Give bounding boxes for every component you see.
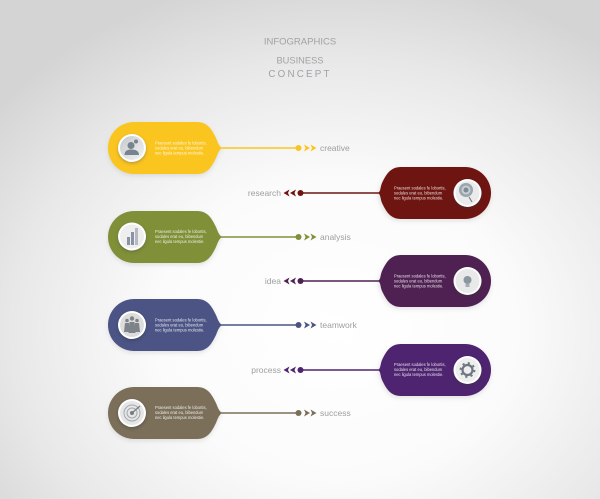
text block: Praesent sodales fe lobortis, [394,274,446,278]
icon: light bulb [454,267,482,296]
text block: Praesent sodales fe lobortis, [155,229,207,234]
panel: creative [108,122,350,176]
connector: success [220,412,298,414]
label: teamwork: teamwork [320,320,358,330]
text block: sodales erat eu, bibendum [155,410,204,415]
title: CONCEPT [268,69,332,80]
text block: sodales erat eu, bibendum [394,278,443,284]
marker: teamwork [296,322,316,328]
text block: nec ligula tempus molestie. [155,328,204,332]
text block: Praesent sodales fe lobortis, [155,405,207,410]
text block: nec ligula tempus molestie. [155,415,204,420]
text block: Praesent sodales fe lobortis, [394,362,446,367]
marker: success [296,410,316,416]
connector: analysis [220,236,298,238]
panel: idea [265,255,491,309]
text block: Praesent sodales fe lobortis, [155,318,207,322]
text block: Praesent sodales fe lobortis, [155,140,207,146]
connector: idea [301,280,380,282]
marker: analysis [296,234,316,240]
text block: sodales erat eu, bibendum [155,322,204,328]
icon: magnifier [454,179,482,208]
text block: sodales erat eu, bibendum [155,146,204,150]
text block: Praesent sodales fe lobortis, [394,186,446,190]
label: process: process [251,365,281,375]
icon: gear [454,356,482,386]
marker: research [284,190,304,196]
text block: sodales erat eu, bibendum [394,367,443,372]
text block: nec ligula tempus molestie. [155,150,204,156]
text block: nec ligula tempus molestie. [394,284,443,288]
panel: process [251,344,491,398]
label: analysis: analysis [320,232,351,242]
label: idea: idea [265,276,281,286]
text block: sodales erat eu, bibendum [155,234,204,239]
icon: bar chart [118,222,146,252]
icon: people [118,311,146,340]
connector: creative [220,147,298,149]
panel: success [108,387,351,441]
panel: teamwork [108,299,358,353]
text block: nec ligula tempus molestie. [155,239,204,244]
connector: process [301,369,380,371]
text block: nec ligula tempus molestie. [394,372,443,377]
label: research: research [248,188,281,198]
panel: research [248,167,491,221]
panel: analysis [108,211,351,265]
title: INFOGRAPHICS [264,36,336,48]
marker: idea [284,278,304,284]
text block: sodales erat eu, bibendum [394,190,443,196]
label: success: success [320,408,351,418]
label: creative: creative [320,143,350,153]
marker: process [284,366,304,374]
title [264,36,336,80]
text block: nec ligula tempus molestie. [394,196,443,200]
connector: teamwork [220,324,298,326]
icon: target [118,399,146,428]
marker: creative [296,144,316,152]
connector: research [301,192,380,194]
icon: person [118,134,146,164]
title: BUSINESS [276,56,324,66]
